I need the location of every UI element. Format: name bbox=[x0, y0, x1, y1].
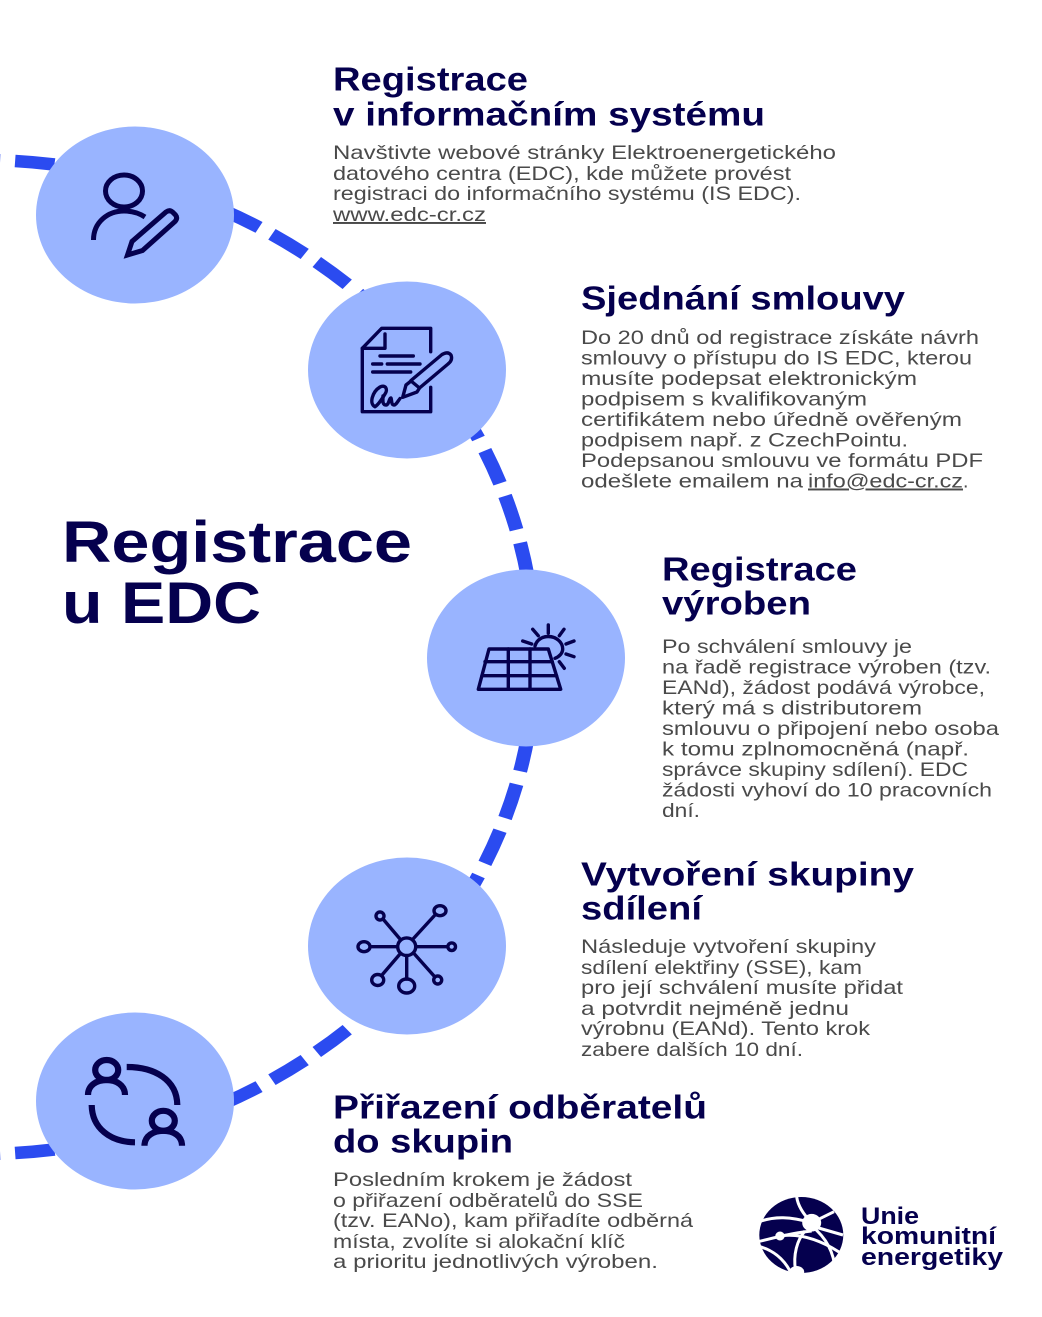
step 4 text: pro její schválení musíte přidat bbox=[581, 977, 904, 999]
logo wordmark: komunitní bbox=[861, 1223, 998, 1250]
step 3 text: EANd), žádost podává výrobce, bbox=[662, 677, 985, 699]
step 2 text bbox=[581, 327, 983, 492]
step 4 text: Následuje vytvoření skupiny bbox=[581, 936, 876, 958]
step 4: sharing group bbox=[308, 856, 914, 1061]
step 5 text: Posledním krokem je žádost bbox=[333, 1169, 633, 1191]
step 2 circle bbox=[308, 282, 506, 458]
step 2 text: Do 20 dnů od registrace získáte návrh bbox=[581, 327, 979, 349]
step 4 text: a potvrdit nejméně jednu bbox=[581, 998, 849, 1020]
step 3 circle bbox=[427, 570, 625, 746]
step 4 text: sdílení elektřiny (SSE), kam bbox=[581, 957, 862, 979]
step 2 text: musíte podepsat elektronickým bbox=[581, 368, 917, 390]
step 5 circle bbox=[36, 1012, 234, 1190]
step 4 heading bbox=[581, 856, 914, 928]
step 5 heading: Přiřazení odběratelů bbox=[333, 1090, 707, 1126]
step 1 text: datového centra (EDC), kde můžete provést bbox=[333, 163, 792, 185]
step 2 text: . bbox=[963, 470, 968, 492]
step 2 text: podpisem s kvalifikovaným bbox=[581, 388, 867, 410]
step 1 text: Navštivte webové stránky Elektroenergetického bbox=[333, 142, 836, 164]
step 2 text: smlouvy o přístupu do IS EDC, kterou bbox=[581, 348, 972, 370]
logo wordmark: Unie bbox=[861, 1203, 919, 1230]
logo wordmark: energetiky bbox=[861, 1244, 1004, 1271]
step 2 text: Podepsanou smlouvu ve formátu PDF bbox=[581, 450, 983, 472]
step 1 heading bbox=[333, 62, 765, 134]
step 4 text: výrobnu (EANd). Tento krok bbox=[581, 1018, 870, 1040]
step 3 text: který má s distributorem bbox=[662, 698, 922, 720]
icon: user with pencil bbox=[94, 175, 177, 255]
main title bbox=[62, 510, 412, 636]
step 3 heading: výroben bbox=[662, 586, 811, 622]
step 5 text: o přiřazení odběratelů do SSE bbox=[333, 1190, 643, 1212]
logo wordmark bbox=[861, 1203, 1004, 1271]
dashed connector arc bbox=[0, 160, 535, 1154]
step 1: registration in information system bbox=[36, 62, 836, 304]
step 3 text bbox=[662, 636, 999, 822]
step 2 text: certifikátem nebo úředně ověřeným bbox=[581, 409, 962, 431]
step 2 text: odešlete emailem na bbox=[581, 470, 803, 492]
step 5 heading bbox=[333, 1090, 707, 1160]
step 1 heading: v informačním systému bbox=[333, 96, 765, 134]
step 4 text: zabere dalších 10 dní. bbox=[581, 1039, 803, 1061]
step 2 text: podpisem např. z CzechPointu. bbox=[581, 430, 908, 452]
icon: two users in a cycle bbox=[88, 1060, 182, 1146]
icon: signed document bbox=[362, 328, 452, 412]
logo: Unie komunitní energetiky bbox=[758, 1197, 1004, 1278]
step 3 text: správce skupiny sdílení). EDC bbox=[662, 759, 968, 781]
step 5 text: (tzv. EANo), kam přiřadíte odběrná bbox=[333, 1210, 693, 1232]
step 3 heading: Registrace bbox=[662, 552, 857, 588]
icon: solar panel with sun bbox=[478, 625, 574, 689]
step 5 text bbox=[333, 1169, 693, 1273]
step 1 circle bbox=[36, 126, 234, 304]
step 5 text: místa, zvolíte si alokační klíč bbox=[333, 1231, 625, 1253]
step 1 heading: Registrace bbox=[333, 62, 528, 98]
logo globe mark bbox=[758, 1197, 843, 1278]
step 3 text: k tomu zplnomocněná (např. bbox=[662, 738, 969, 760]
step 3 text: žádosti vyhoví do 10 pracovních bbox=[662, 780, 992, 802]
step 1 text: www.edc-cr.cz bbox=[332, 204, 486, 226]
step 2 text: info@edc-cr.cz bbox=[808, 470, 963, 492]
main title: u EDC bbox=[62, 571, 261, 636]
step 4 circle bbox=[308, 858, 506, 1034]
icon: network hub bbox=[358, 906, 456, 993]
step 5 text: a prioritu jednotlivých výroben. bbox=[333, 1251, 658, 1273]
step 1 text bbox=[332, 142, 836, 226]
step 3 text: na řadě registrace výroben (tzv. bbox=[662, 656, 991, 678]
step 5: assigning consumers bbox=[36, 1012, 707, 1273]
step 1 text: registraci do informačního systému (IS EDC). bbox=[333, 183, 801, 205]
main title: Registrace bbox=[62, 510, 412, 575]
step 3: generation registration bbox=[427, 552, 999, 822]
step 4 heading: sdílení bbox=[581, 890, 704, 928]
step 4 text bbox=[581, 936, 904, 1061]
step 2 heading: Sjednání smlouvy bbox=[581, 280, 905, 318]
step 3 heading bbox=[662, 552, 857, 622]
step 3 text: dní. bbox=[662, 800, 700, 822]
step 4 heading: Vytvoření skupiny bbox=[581, 856, 914, 894]
step 3 text: smlouvu o připojení nebo osoba bbox=[662, 718, 999, 740]
step 2: contract bbox=[308, 280, 983, 492]
step 3 text: Po schválení smlouvy je bbox=[662, 636, 912, 658]
step 5 heading: do skupin bbox=[333, 1124, 513, 1160]
